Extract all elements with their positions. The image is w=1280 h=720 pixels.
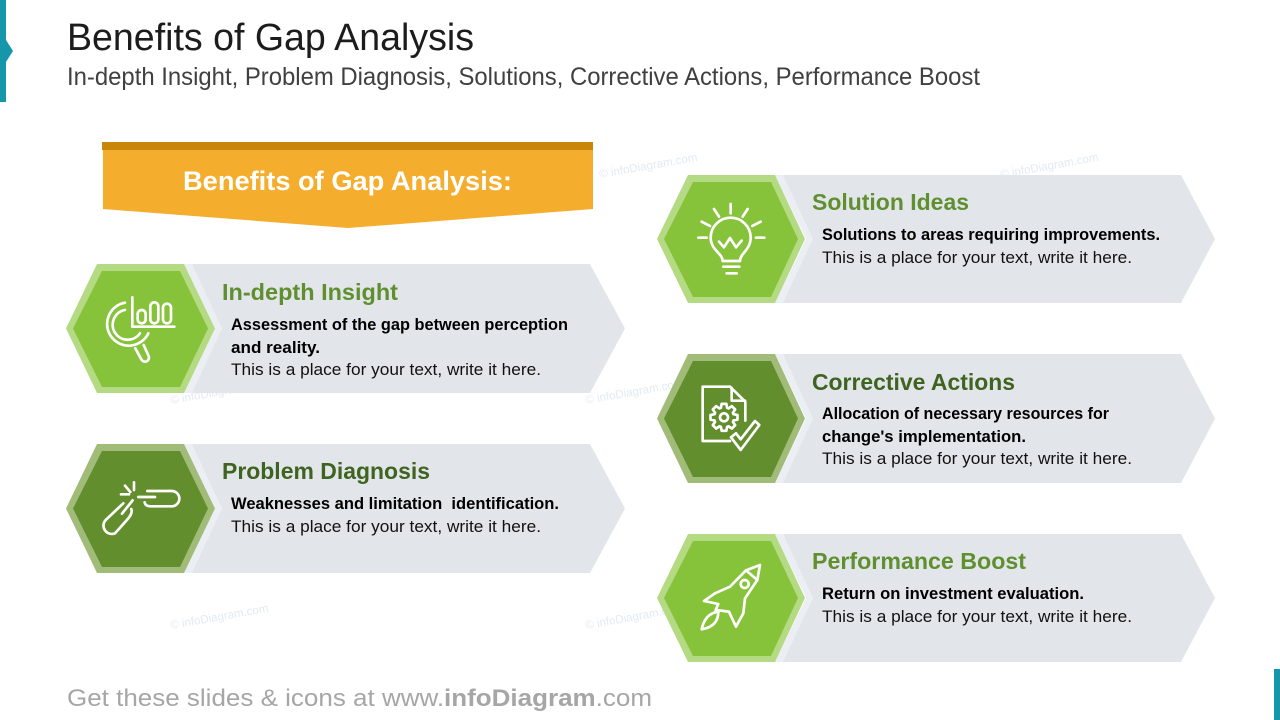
left accent tab <box>0 0 13 102</box>
text block: This is a place for your text, write it here. <box>822 607 1132 626</box>
text block: Return on investment evaluation. <box>822 584 1084 603</box>
text block: Allocation of necessary resources for <box>822 404 1109 423</box>
watermarks: © infoDiagram.com <box>584 377 684 407</box>
text block: This is a place for your text, write it here. <box>822 449 1132 468</box>
icon: document with gear and check <box>703 387 759 450</box>
icon: broken chain <box>103 482 179 534</box>
heading: Performance Boost <box>812 548 1026 574</box>
watermarks: © infoDiagram.com <box>598 151 698 181</box>
text block: This is a place for your text, write it here. <box>231 360 541 379</box>
watermarks: © infoDiagram.com <box>169 377 269 407</box>
text block: Assessment of the gap between perception <box>231 315 568 334</box>
heading: Problem Diagnosis <box>222 458 430 484</box>
watermarks: © infoDiagram.com <box>169 602 269 632</box>
watermarks: © infoDiagram.com <box>584 602 684 632</box>
watermarks <box>169 151 1099 632</box>
text block: Weaknesses and limitation identification. <box>231 494 559 513</box>
heading: Corrective Actions <box>812 369 1015 395</box>
text block: and reality. <box>231 338 320 357</box>
text block <box>822 584 1132 626</box>
text block: This is a place for your text, write it here. <box>822 248 1132 267</box>
text block <box>822 225 1160 267</box>
icon: magnifier over bar chart <box>107 297 174 362</box>
text block <box>231 494 559 536</box>
subtitle: In-depth Insight, Problem Diagnosis, Solutions, Corrective Actions, Performance Boost <box>67 63 980 91</box>
heading: Solution Ideas <box>812 189 969 215</box>
text block <box>231 315 568 379</box>
heading: In-depth Insight <box>222 279 398 305</box>
panel: performance boost <box>657 534 1215 662</box>
panel: corrective actions <box>657 354 1215 483</box>
bottom-right accent bar <box>1274 669 1280 720</box>
watermarks: © infoDiagram.com <box>999 151 1099 181</box>
panel: in-depth insight <box>66 264 625 393</box>
icon: light bulb <box>698 204 764 273</box>
banner <box>102 142 593 228</box>
text block: Solutions to areas requiring improvements. <box>822 225 1160 244</box>
footer text: Get these slides & icons at www. infoDiagram .com <box>67 685 652 712</box>
banner heading: Benefits of Gap Analysis: <box>183 166 512 196</box>
panel: problem diagnosis <box>66 444 625 573</box>
text block <box>822 404 1132 468</box>
text block: change's implementation. <box>822 427 1026 446</box>
icon: rocket <box>702 565 760 629</box>
title: Benefits of Gap Analysis <box>67 17 474 59</box>
text block: This is a place for your text, write it here. <box>231 517 541 536</box>
panel: solution ideas <box>657 175 1215 303</box>
